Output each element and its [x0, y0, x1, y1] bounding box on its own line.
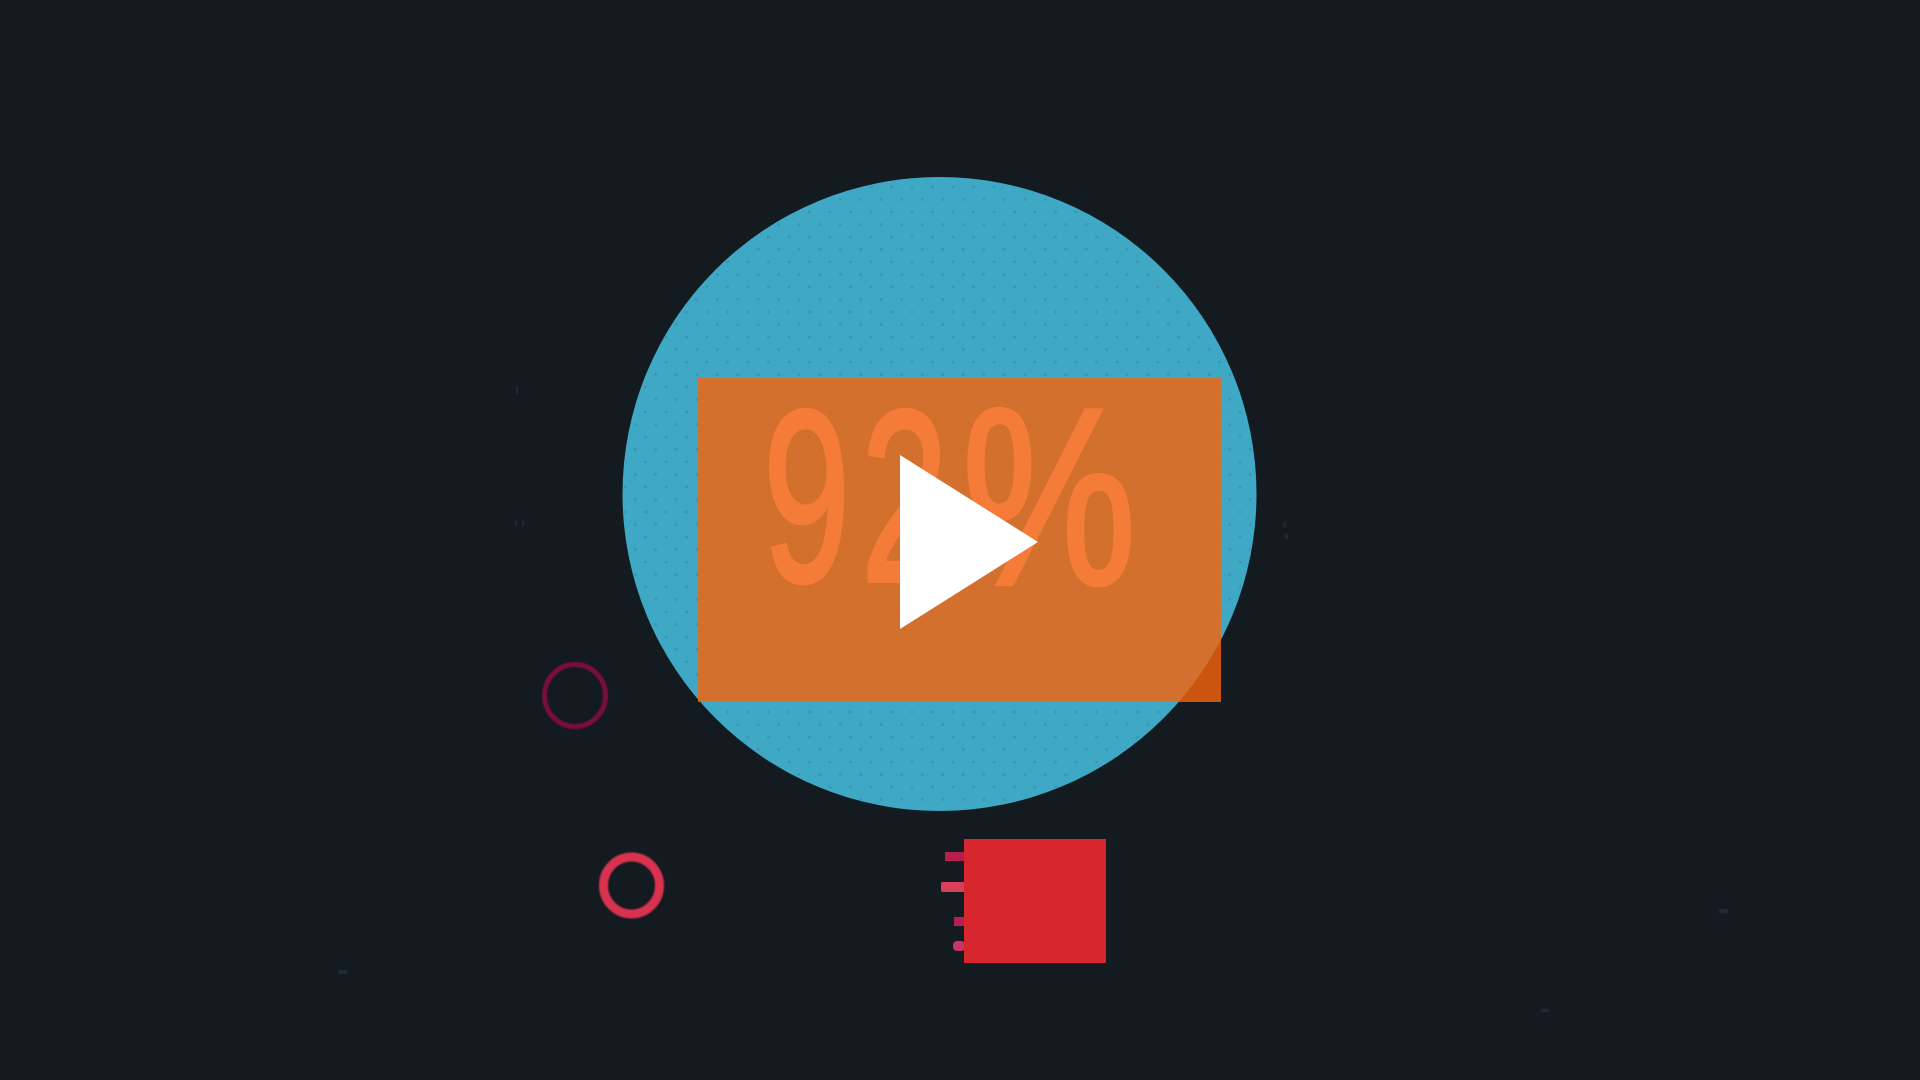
large blue circle [622, 177, 1256, 811]
dark crimson ring [544, 664, 606, 726]
statistic: 92% [763, 355, 1136, 638]
background specks [338, 386, 1728, 1012]
play button icon [900, 455, 1038, 629]
orange video overlay [698, 378, 1221, 702]
red square with ticks [941, 839, 1106, 963]
statistic: 92%: 9 [763, 359, 850, 633]
statistic: 92%: 2 [861, 359, 948, 633]
red ring [604, 857, 660, 914]
statistic: 92%: % [962, 355, 1136, 638]
